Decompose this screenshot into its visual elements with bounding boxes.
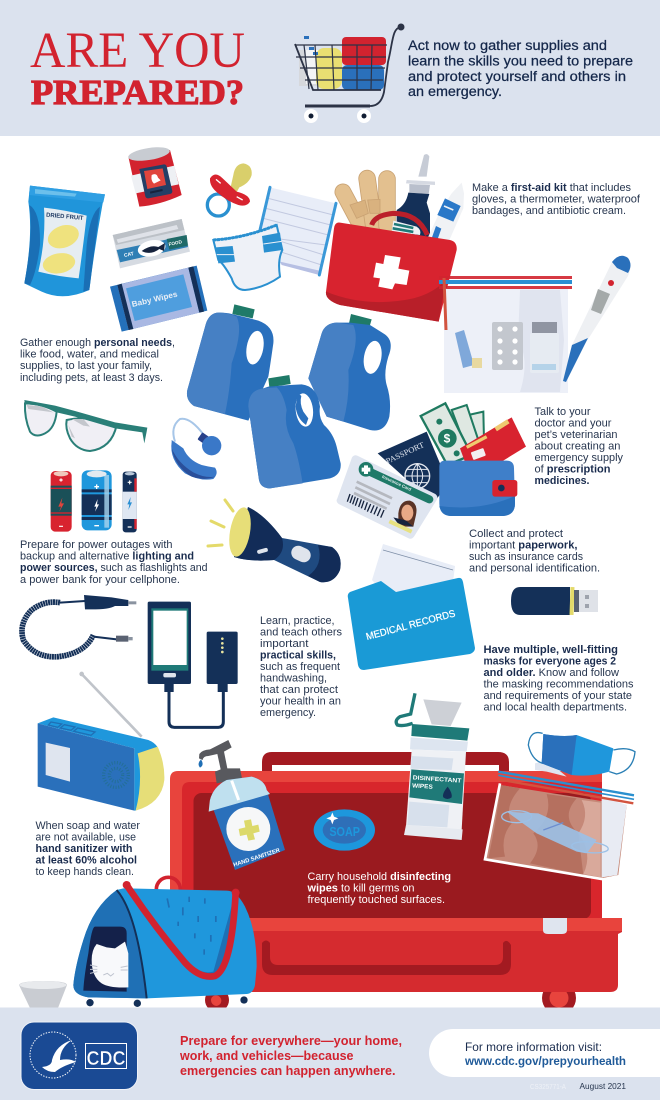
text: disinfecting wipes: Carry household disinfecting bbox=[308, 871, 451, 883]
suitcase top handle bbox=[262, 752, 509, 772]
illustration: baby wipes: Baby Wipes bbox=[131, 290, 179, 309]
text: lighting and power: power sources, such as flashlights and bbox=[20, 562, 208, 574]
illustration: baby wipes bbox=[110, 266, 207, 332]
logo: HHS and CDC: CDC bbox=[86, 1048, 126, 1070]
more information pill: For more information visit: bbox=[465, 1040, 602, 1054]
illustration: power bank bbox=[207, 632, 238, 684]
jug 2 bbox=[308, 314, 391, 431]
illustrations: documents and wallet bbox=[337, 403, 526, 539]
text: personal needs: including pets, at least 3 days. bbox=[20, 372, 163, 384]
illustration: bar of soap bbox=[314, 809, 375, 851]
illustration: dried fruit pouch bbox=[24, 186, 105, 296]
illustrations: baby supplies and first-aid bbox=[207, 154, 464, 322]
panel: header band bbox=[0, 0, 660, 136]
publication info bbox=[530, 1081, 626, 1091]
text: practical skills: and teach others bbox=[260, 626, 343, 638]
illustrations: mask and bag bbox=[485, 733, 635, 879]
illustration: disinfectant wipes canister: DISINFECTANT bbox=[413, 775, 462, 785]
text: practical skills: your health in an bbox=[260, 696, 341, 708]
text: masks: and local health departments. bbox=[484, 702, 627, 714]
illustration: car charger coil bbox=[22, 595, 136, 657]
carrier handle ring bbox=[156, 877, 180, 901]
illustration: medical records folder: MEDICAL RECORDS bbox=[365, 608, 457, 643]
illustration: red emergency suitcase bbox=[170, 752, 622, 1015]
illustration: USB drive bbox=[511, 587, 598, 615]
battery blue bbox=[82, 470, 112, 530]
illustration: diaper bbox=[213, 225, 282, 290]
illustration: hand sanitizer bottle bbox=[199, 740, 285, 870]
illustration: insurance ID card: Insurance Card bbox=[381, 474, 412, 492]
illustration: disinfectant wipes canister: WIPES bbox=[412, 783, 433, 791]
carrier body bbox=[73, 888, 257, 998]
text: personal needs: Gather enough personal needs, bbox=[20, 337, 175, 349]
text: masks: and requirements of your state bbox=[484, 690, 632, 702]
suitcase wheels bbox=[205, 981, 576, 1015]
text: hand sanitizer: to keep hands clean. bbox=[36, 866, 134, 878]
illustration: passport: PASSPORT bbox=[384, 440, 426, 466]
illustration: nasal spray bottle bbox=[397, 154, 435, 237]
illustration: cat food tin bbox=[113, 219, 190, 268]
illustration: cat food tin: FOOD bbox=[168, 239, 183, 247]
illustration: cellphone bbox=[148, 602, 191, 684]
text: practical skills: that can protect bbox=[260, 684, 338, 696]
illustration: bandages bbox=[332, 169, 395, 237]
text: practical skills: emergency. bbox=[260, 707, 316, 719]
illustration: radio bbox=[38, 672, 164, 811]
illustration: dried fruit pouch: DRIED FRUIT bbox=[46, 213, 84, 222]
battery aa bbox=[123, 472, 137, 532]
text: lighting and power bbox=[20, 539, 208, 586]
carrier door bbox=[83, 927, 127, 992]
battery red bbox=[51, 471, 72, 532]
text: practical skills: such as frequent bbox=[260, 661, 340, 673]
text: masks: and older. Know and follow bbox=[484, 667, 619, 679]
illustrations: food group bbox=[24, 145, 207, 332]
text: personal needs: like food, water, and medical bbox=[20, 348, 159, 360]
illustration: antibiotic cream tube bbox=[427, 183, 464, 250]
text: paperwork: important paperwork, bbox=[469, 540, 578, 552]
text: personal needs: supplies, to last your family, bbox=[20, 360, 152, 372]
text: hand sanitizer: When soap and water bbox=[36, 820, 140, 832]
text: lighting and power: Prepare for power outages with bbox=[20, 539, 172, 551]
illustration: bar of soap: SOAP bbox=[329, 825, 360, 839]
call to action: work, and vehicles—because bbox=[179, 1048, 354, 1063]
text: first-aid kit: bandages, and antibiotic cream. bbox=[472, 205, 626, 217]
title: PREPARED? bbox=[31, 73, 244, 112]
illustration: face mask bbox=[528, 733, 635, 777]
illustrations: sanitizer, soap and wipes bbox=[199, 693, 469, 870]
text: first-aid kit bbox=[472, 182, 641, 217]
text: masks: the masking recommendations bbox=[484, 678, 634, 690]
text: practical skills: Learn, practice, bbox=[260, 615, 334, 627]
text: first-aid kit: gloves, a thermometer, waterproof bbox=[472, 194, 641, 206]
illustration: first-aid kit bbox=[326, 213, 457, 322]
illustrations: glasses, hearing aid, batteries bbox=[24, 400, 221, 532]
text: paperwork: such as insurance cards bbox=[469, 551, 584, 563]
text: prescription medicines: Talk to your bbox=[534, 406, 591, 418]
cat bbox=[90, 942, 128, 987]
text: paperwork: and personal identification. bbox=[469, 562, 600, 574]
illustration: kit thermometer bbox=[392, 221, 420, 235]
text: paperwork: Collect and protect bbox=[469, 528, 563, 540]
call to action: emergencies can happen anywhere. bbox=[180, 1063, 396, 1078]
text: lighting and power: a power bank for your cellphone. bbox=[20, 574, 180, 586]
suitcase base bbox=[170, 918, 622, 992]
intro text: an emergency. bbox=[408, 84, 502, 99]
illustration: zip bag with mask bbox=[485, 772, 634, 879]
intro text bbox=[408, 38, 633, 99]
call to action: Prepare for everywhere—your home, bbox=[180, 1033, 402, 1048]
illustration: power bank cable bbox=[164, 683, 228, 727]
text: hand sanitizer bbox=[36, 820, 140, 878]
logo: HHS and CDC bbox=[21, 1022, 138, 1090]
suitcase lid bbox=[170, 771, 602, 919]
illustration: disinfectant wipes canister bbox=[396, 693, 469, 840]
panel: footer band bbox=[0, 1008, 660, 1100]
publication info: CS325771-A bbox=[530, 1084, 566, 1091]
illustration: money: $ bbox=[444, 432, 451, 446]
text: hand sanitizer: hand sanitizer with bbox=[36, 843, 132, 855]
illustration: insurance ID card bbox=[337, 455, 437, 539]
carrier wheel bbox=[209, 993, 223, 1008]
text: disinfecting wipes bbox=[306, 871, 451, 906]
carrier side bbox=[73, 890, 147, 998]
more information pill: www.cdc.gov/prepyourhealth bbox=[464, 1054, 626, 1068]
text: paperwork bbox=[469, 528, 600, 574]
illustration: zip bag with medicines bbox=[439, 276, 572, 393]
text: practical skills: handwashing, bbox=[260, 672, 327, 684]
illustration: pet carrier with cat bbox=[73, 877, 257, 1008]
illustrations: chargers and radio bbox=[22, 595, 238, 811]
icon: shopping cart bbox=[295, 24, 404, 123]
text: hand sanitizer: are not available, use bbox=[36, 832, 136, 844]
text: practical skills bbox=[260, 615, 343, 719]
intro text: learn the skills you need to prepare bbox=[408, 54, 633, 68]
text: prescription medicines: about creating an bbox=[534, 440, 620, 452]
more information pill bbox=[429, 1029, 660, 1077]
text: hand sanitizer: at least 60% alcohol bbox=[36, 854, 137, 866]
text: prescription medicines: medicines. bbox=[534, 475, 590, 487]
illustration: water jugs bbox=[187, 304, 391, 488]
illustration: credit card bbox=[460, 417, 526, 467]
intro text: Act now to gather supplies and bbox=[408, 38, 607, 53]
illustration: digital thermometer bbox=[563, 256, 630, 382]
text: disinfecting wipes: frequently touched surfaces. bbox=[308, 894, 445, 906]
text: prescription medicines: doctor and your bbox=[534, 418, 612, 430]
illustration: eyeglasses bbox=[24, 400, 147, 451]
text: personal needs bbox=[20, 337, 175, 384]
text: lighting and power: backup and alternative lighting and bbox=[20, 550, 194, 562]
text: first-aid kit: Make a first-aid kit that includes bbox=[472, 182, 632, 194]
text: prescription medicines: emergency supply bbox=[534, 452, 624, 464]
text: practical skills: important bbox=[260, 638, 308, 650]
illustration: cat food tin: CAT bbox=[124, 251, 134, 259]
illustration: cloth wipes bbox=[260, 187, 336, 275]
carrier seams bbox=[166, 897, 217, 955]
call to action bbox=[179, 1033, 402, 1078]
text: prescription medicines: pet’s veterinarian bbox=[534, 429, 618, 441]
illustration: passport bbox=[378, 432, 448, 503]
text: disinfecting wipes: wipes to kill germs on bbox=[306, 882, 414, 894]
illustration: canned food bbox=[127, 145, 182, 207]
illustration: wallet bbox=[439, 461, 517, 516]
publication info: August 2021 bbox=[580, 1081, 626, 1091]
jug 3 bbox=[248, 375, 341, 488]
text: masks: Have multiple, well-fitting bbox=[484, 644, 618, 656]
illustration: pet bowl bbox=[19, 981, 67, 1008]
carrier strap shade bbox=[132, 893, 233, 978]
illustration: hand sanitizer bottle: HAND SANITIZER bbox=[233, 848, 281, 869]
text: prescription medicines: of prescription bbox=[534, 464, 610, 476]
title bbox=[30, 23, 245, 112]
text: prescription medicines bbox=[534, 406, 624, 487]
carrier feet bbox=[86, 996, 248, 1007]
illustration: flashlight bbox=[208, 500, 341, 582]
text: masks: masks for everyone ages 2 bbox=[484, 656, 616, 668]
title: ARE YOU bbox=[30, 23, 245, 79]
text: practical skills: practical skills, bbox=[260, 650, 336, 662]
illustration: medical records folder bbox=[348, 544, 475, 670]
text: masks bbox=[484, 644, 634, 714]
jug 1 bbox=[187, 304, 273, 421]
illustration: hearing aid bbox=[171, 419, 221, 480]
illustration: money bbox=[421, 403, 484, 465]
carrier strap bbox=[127, 885, 236, 977]
illustration: pacifier bbox=[207, 163, 252, 216]
intro text: and protect yourself and others in bbox=[408, 69, 626, 84]
